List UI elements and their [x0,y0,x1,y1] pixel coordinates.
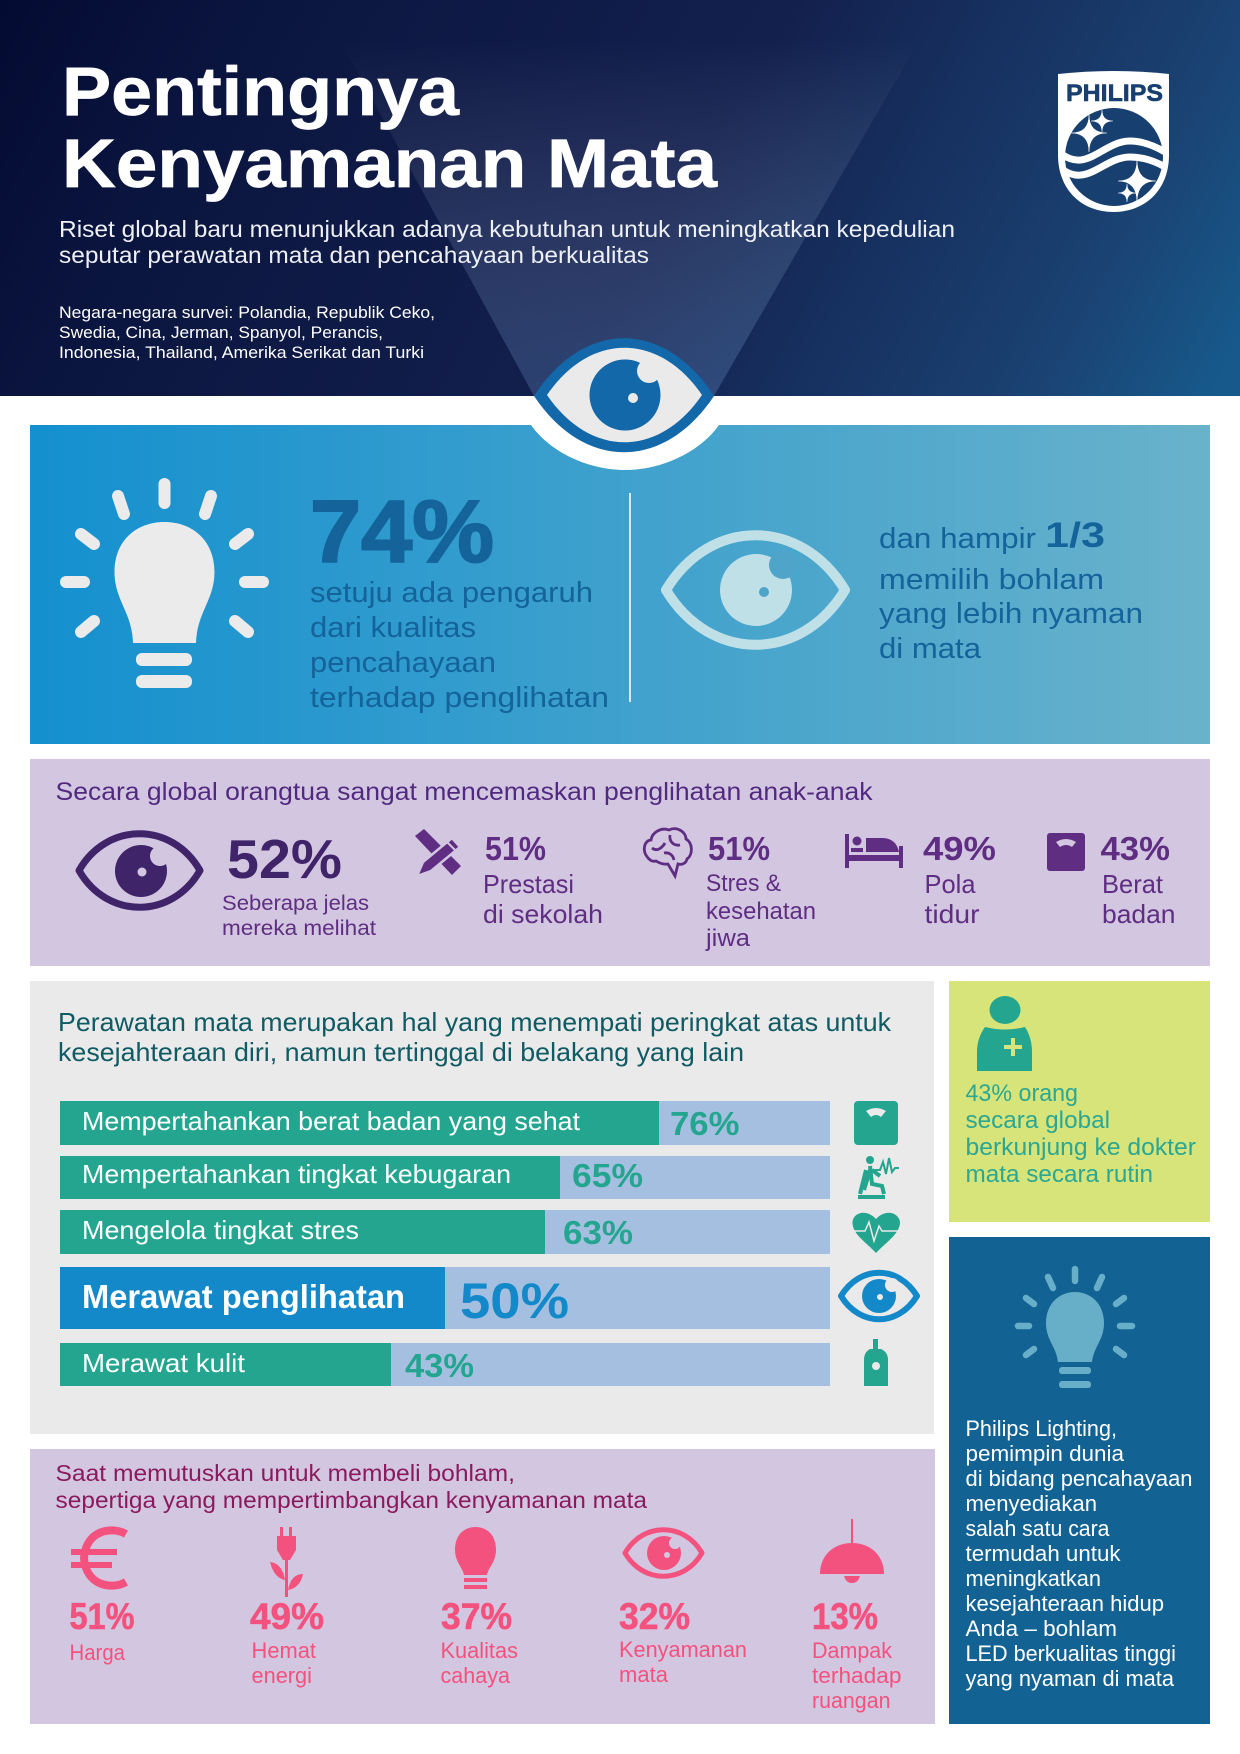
bar: stress 63 percent [60,1210,830,1254]
stat: school: di sekolah [483,899,603,929]
icon: bulb [1018,1269,1132,1388]
stat: 52 percent: mereka melihat [222,917,376,940]
icon: heart [852,1213,900,1253]
heading: Secara global orangtua sangat mencemaskan penglihatan anak-anak [56,778,873,806]
stat: sleep: tidur [924,899,980,929]
icon: euro [71,1530,126,1586]
icon: scale [854,1101,898,1145]
stat: school [483,830,603,929]
stat: energy [250,1596,324,1688]
stat: 52 percent: 52% [227,828,342,890]
icon: plug [270,1527,303,1597]
stat: 74 percent [310,482,609,714]
icon: hanging lamp [820,1519,884,1583]
icon: eye [666,535,845,645]
icon: light bulb [66,484,263,688]
stat: school: 51% [485,830,546,867]
panel: parents worry [30,759,1210,966]
stat: one third: 1/3 [1045,516,1105,555]
bar: stress 63 percent: Mengelola tingkat stres [82,1215,359,1245]
survey countries: Swedia, Cina, Jerman, Spanyol, Perancis, [59,324,383,342]
stat: stress: jiwa [705,925,751,952]
icon: doctor [977,996,1032,1071]
title: Pentingnya [62,53,460,130]
heading [56,1460,647,1513]
text: pemimpin dunia [966,1441,1125,1466]
title: Kenyamanan Mata [62,125,718,202]
stat: 74 percent: 74% [310,482,494,581]
stat: price: Harga [70,1640,126,1665]
stat: energy: energi [252,1663,312,1688]
panel: 74 percent lighting [30,425,1210,744]
stat: stress [705,830,816,952]
bar: vision 50 percent: Merawat penglihatan [82,1278,405,1315]
text: secara global [966,1107,1110,1134]
text: salah satu cara [966,1516,1110,1541]
stat: eye comfort [619,1596,747,1687]
stat: light quality: cahaya [440,1663,511,1688]
header panel [0,0,1240,396]
stat: 74 percent: terhadap penglihatan [310,682,609,714]
icon: brain [644,829,691,876]
panel: Philips Lighting [949,1237,1210,1724]
stat: sleep: 49% [923,830,996,867]
bar: fitness 65 percent: 65% [572,1157,643,1194]
stat: one third: dan hampir [879,523,1036,555]
heading [58,1007,892,1067]
text: mata secara rutin [966,1161,1153,1188]
subtitle [59,216,955,268]
icon: hiker [858,1156,899,1197]
heading: Perawatan mata merupakan hal yang menempati peringkat atas untuk [58,1007,892,1037]
bar: skin 43 percent: 43% [405,1347,474,1384]
bar: skin 43 percent [60,1343,830,1386]
icon: bed [845,834,903,868]
bar: vision 50 percent [60,1267,830,1329]
panel: eye care ranking [30,981,934,1434]
bar: skin 43 percent: Merawat kulit [82,1348,246,1378]
stat: stress: kesehatan [706,898,816,925]
stat: energy: 49% [250,1596,324,1637]
text: di bidang pencahayaan [966,1466,1192,1491]
stat: sleep [923,830,996,929]
text: termudah untuk [966,1541,1122,1566]
icon: weighing scale [1047,833,1085,871]
stat: stress: 51% [708,830,770,867]
heading: kesejahteraan diri, namun tertinggal di belakang yang lain [58,1037,744,1067]
stat: room effect: ruangan [812,1688,890,1713]
stat: one third: yang lebih nyaman [879,598,1143,630]
title [62,53,718,202]
heading: sepertiga yang mempertimbangkan kenyamanan mata [56,1487,647,1513]
stat: 74 percent: setuju ada pengaruh [310,577,593,609]
bar: fitness 65 percent: Mempertahankan tingkat kebugaran [82,1159,511,1189]
bar: weight 76 percent: Mempertahankan berat badan yang sehat [82,1106,581,1136]
stat: weight: badan [1102,899,1176,929]
Philips logo [1058,71,1169,212]
stat: price: 51% [70,1596,134,1637]
text: Anda – bohlam [966,1616,1117,1641]
icon: ruler and pencil [415,829,461,876]
panel: bulb purchase factors [30,1449,935,1724]
stat: 52 percent: Seberapa jelas [222,892,369,915]
stat: 74 percent: pencahayaan [310,647,496,679]
text: yang nyaman di mata [966,1666,1175,1691]
icon: bulb [455,1527,496,1589]
stat: room effect: 13% [812,1596,878,1637]
bar: weight 76 percent [60,1101,830,1145]
text [966,1080,1196,1188]
icon: eye [625,1530,702,1576]
stat: eye comfort: Kenyamanan [619,1637,747,1662]
text: 43% orang [966,1080,1078,1107]
stat: room effect: terhadap [812,1663,902,1688]
icon: header eye [531,338,719,470]
stat: light quality [440,1596,518,1688]
subtitle: seputar perawatan mata dan pencahayaan berkualitas [59,242,649,268]
heading: Saat memutuskan untuk membeli bohlam, [56,1460,515,1486]
bar: fitness 65 percent [60,1156,830,1199]
survey countries: Indonesia, Thailand, Amerika Serikat dan Turki [59,344,424,362]
bar: weight 76 percent: 76% [670,1105,740,1142]
stat: eye comfort: mata [619,1662,669,1687]
stat: room effect: Dampak [812,1638,893,1663]
stat: eye comfort: 32% [619,1596,690,1637]
text: berkunjung ke dokter [966,1134,1196,1161]
icon: eye [79,834,200,907]
stat: light quality: Kualitas [440,1638,518,1663]
stat: room effect [812,1596,902,1713]
stat: price [70,1596,134,1665]
stat: 52 percent [222,828,376,940]
text: meningkatkan [966,1566,1101,1591]
stat: one third: memilih bohlam [879,564,1104,596]
stat: weight: 43% [1100,830,1170,867]
stat: sleep: Pola [924,869,976,899]
stat: weight [1100,830,1176,929]
text: Philips Lighting, [966,1416,1117,1441]
stat: 74 percent: dari kualitas [310,612,476,644]
stat: one third [879,516,1143,665]
stat: one third: di mata [879,633,982,665]
stat: light quality: 37% [441,1596,512,1637]
subtitle: Riset global baru menunjukkan adanya kebutuhan untuk meningkatkan kepedulian [59,216,955,242]
text [966,1416,1192,1691]
panel: eye doctor visits [949,981,1210,1222]
survey countries: Negara-negara survei: Polandia, Republik Ceko, [59,304,435,322]
icon: bottle [864,1339,888,1386]
text: menyediakan [966,1491,1097,1516]
stat: stress: Stres & [706,870,781,897]
icon: eye [841,1273,917,1319]
stat: school: Prestasi [483,869,574,899]
bar: stress 63 percent: 63% [563,1214,633,1251]
text: kesejahteraan hidup [966,1591,1164,1616]
bar: vision 50 percent: 50% [460,1273,569,1329]
Philips logo: PHILIPS [1066,80,1163,107]
text: LED berkualitas tinggi [966,1641,1176,1666]
survey countries [59,304,435,362]
stat: energy: Hemat [252,1638,316,1663]
stat: weight: Berat [1102,869,1164,899]
